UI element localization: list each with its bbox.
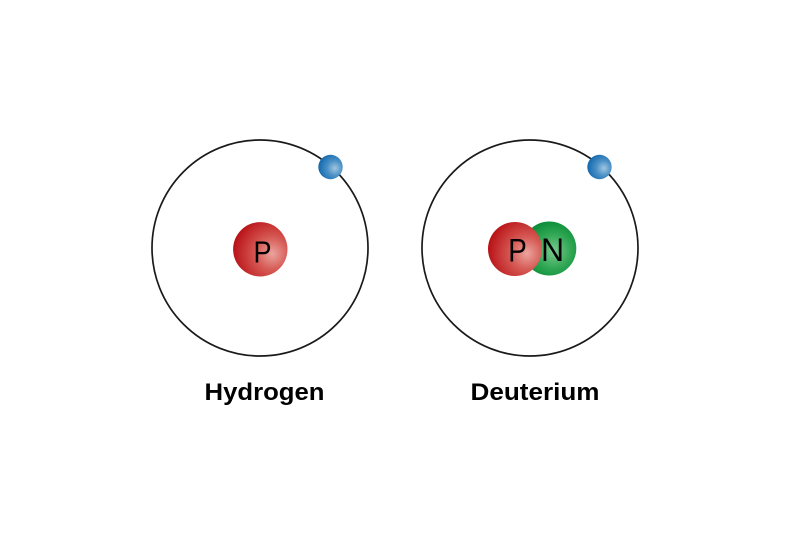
label: Hydrogen: Hydrogen bbox=[204, 379, 324, 406]
atom: hydrogen bbox=[152, 140, 368, 356]
electron: hydrogen bbox=[318, 155, 343, 179]
proton: hydrogen: P bbox=[254, 235, 272, 270]
proton: hydrogen bbox=[233, 222, 288, 276]
atom: deuterium bbox=[422, 140, 638, 356]
electron: deuterium bbox=[587, 155, 612, 179]
proton: deuterium bbox=[488, 222, 542, 276]
orbit: deuterium bbox=[422, 140, 638, 356]
proton: deuterium: P bbox=[508, 233, 527, 269]
orbit: hydrogen bbox=[152, 140, 368, 356]
neutron bbox=[522, 222, 576, 276]
neutron: N bbox=[541, 232, 564, 268]
label: Deuterium: Deuterium bbox=[470, 379, 600, 406]
